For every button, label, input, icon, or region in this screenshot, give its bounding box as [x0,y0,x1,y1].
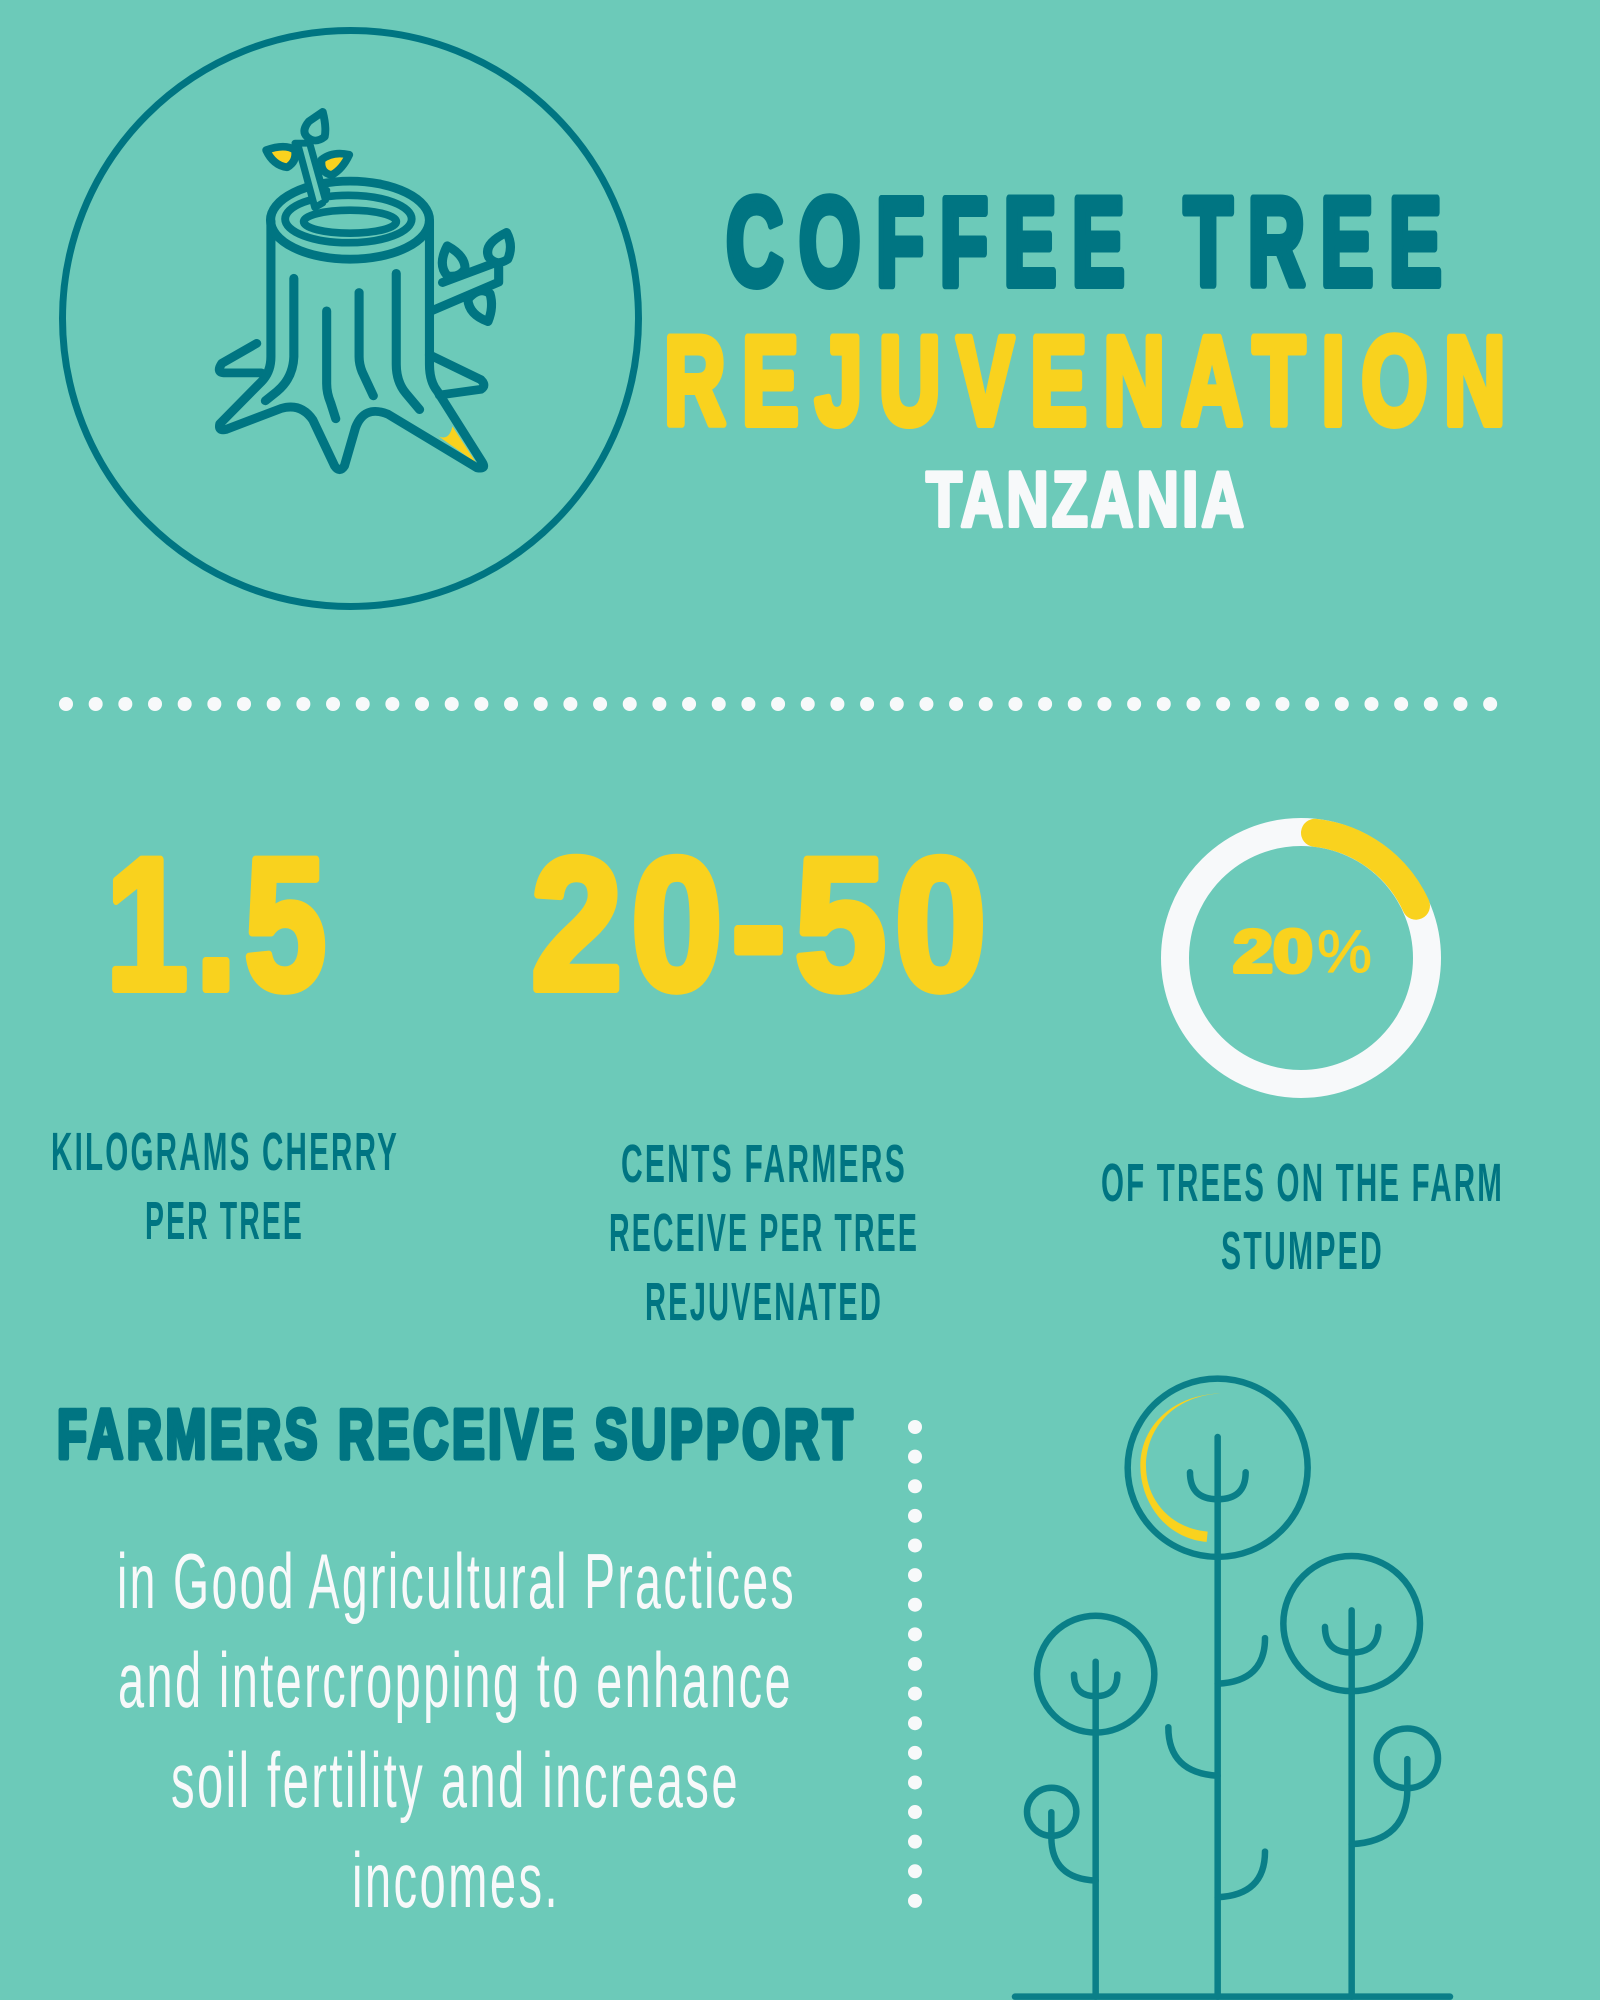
title: tanzania: TANZANIA [926,455,1247,543]
donut value: 20 [1233,918,1313,985]
horizontal dotted divider [66,697,1491,711]
label: trees stumped [1101,1153,1504,1281]
body text: in Good Agricultural Practices [117,1537,796,1625]
label: cents farmers receive [609,1134,919,1332]
label: cents farmers receive: REJUVENATED [645,1272,883,1332]
stat: 20-50: 20-50 [531,819,995,1029]
body text: soil fertility and increase [171,1736,740,1824]
donut value: % [1317,918,1372,985]
label: kilograms cherry per tree: PER TREE [145,1191,304,1251]
heading: farmers receive support: FARMERS RECEIVE SUPPORT [57,1395,856,1473]
label: kilograms cherry per tree [51,1122,399,1251]
icon: three trees [1015,1379,1450,1997]
chart: 20% donut [1175,832,1427,1084]
label: cents farmers receive: RECEIVE PER TREE [609,1203,919,1263]
body text: incomes. [352,1836,560,1924]
icon: tree stump in circle [62,30,638,606]
body text [117,1537,796,1924]
label: cents farmers receive: CENTS FARMERS [621,1134,907,1194]
body text: and intercropping to enhance [118,1636,793,1724]
vertical dotted divider [908,1427,922,1902]
stat: 1.5: 1.5 [106,819,334,1029]
label: trees stumped: STUMPED [1221,1221,1384,1281]
label: kilograms cherry per tree: KILOGRAMS CHERRY [51,1122,399,1182]
